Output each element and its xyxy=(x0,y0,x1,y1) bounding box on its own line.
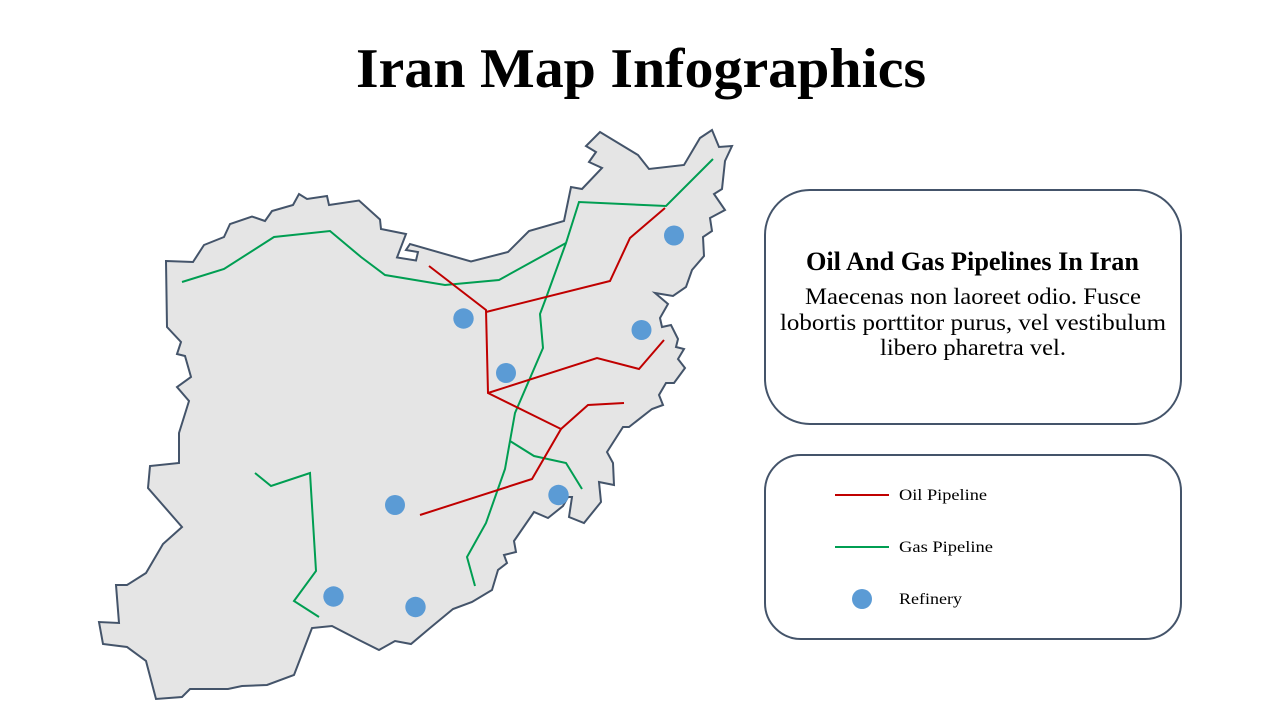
gas pipelines xyxy=(182,159,713,617)
refinery markers xyxy=(323,226,684,617)
oil pipelines xyxy=(420,208,665,515)
country outline xyxy=(99,130,732,699)
legend item: refinery xyxy=(852,589,962,609)
legend item: oil pipeline: Oil Pipeline xyxy=(899,487,987,504)
panel body text: lobortis porttitor purus, vel vestibulum xyxy=(780,310,1166,335)
panel: legend xyxy=(765,455,1181,639)
panel heading: Oil And Gas Pipelines In Iran xyxy=(806,247,1140,276)
panel border xyxy=(765,190,1181,424)
legend border xyxy=(765,455,1181,639)
panel body text xyxy=(780,284,1166,360)
panel: description xyxy=(765,190,1181,424)
title: Iran Map Infographics xyxy=(356,38,926,100)
panel body text: Maecenas non laoreet odio. Fusce xyxy=(805,284,1141,309)
panel body text: libero pharetra vel. xyxy=(880,335,1066,360)
legend item: refinery: Refinery xyxy=(899,591,962,608)
legend item: gas pipeline: Gas Pipeline xyxy=(899,539,993,556)
map of Iran with pipelines and refineries xyxy=(99,130,732,699)
